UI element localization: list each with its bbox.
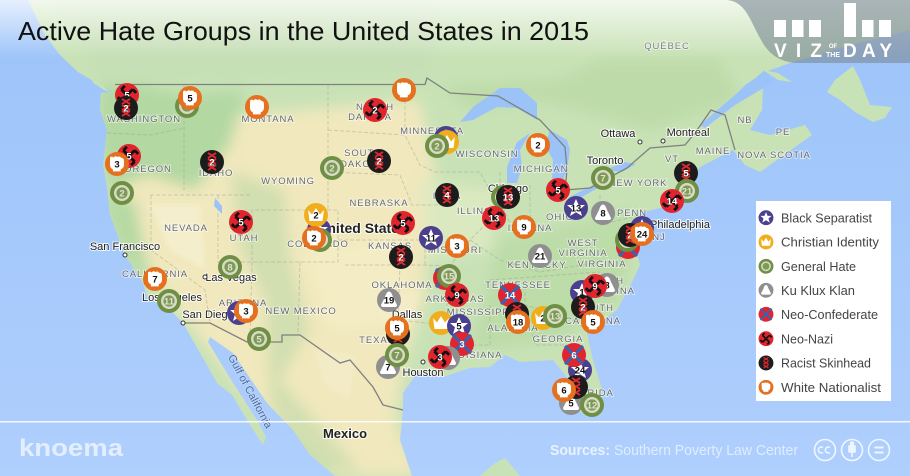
geographic labels: WISCONSIN — [456, 149, 518, 160]
marker: Neo-Confederate FL — [562, 343, 586, 367]
marker: General Hate FL: 12 — [587, 400, 597, 412]
geographic labels: NORTH — [586, 276, 624, 287]
marker: Racist Skinhead ID — [200, 150, 224, 174]
geographic labels: QUÉBEC — [644, 41, 690, 52]
marker: Racist Skinhead SD — [367, 149, 391, 173]
marker: Black Separatist AZ — [227, 301, 251, 325]
geographic labels: IOWA — [433, 191, 461, 202]
legend: General Hate: General Hate — [781, 259, 856, 274]
marker: General Hate MA: 21 — [682, 186, 693, 198]
marker: Racist Skinhead IL — [496, 185, 520, 209]
geographic labels: COLORADO — [287, 239, 349, 250]
marker: Neo-Nazi NC — [583, 274, 607, 298]
legend: Ku Klux Klan: Ku Klux Klan — [781, 283, 855, 298]
marker: White Nationalist AL — [506, 310, 530, 334]
marker: Racist Skinhead KS — [389, 245, 413, 269]
marker: Neo-Confederate AR — [433, 266, 457, 290]
borders: international — [115, 78, 735, 410]
marker: Christian Identity GA — [531, 306, 555, 330]
marker: White Nationalist CO — [302, 226, 326, 250]
marker: General Hate GA — [543, 304, 567, 328]
legend — [756, 201, 891, 401]
legend: Black Separatist: Black Separatist — [781, 210, 872, 226]
marker: Ku Klux Klan OK — [377, 288, 401, 312]
geographic labels: TENNESSEE — [485, 280, 551, 291]
geographic labels: Ottawa — [601, 128, 636, 140]
marker: Racist Skinhead IL: 13 — [503, 192, 513, 204]
marker: Racist Skinhead SC: 2 — [580, 302, 586, 314]
marker: Racist Skinhead VT: 5 — [683, 168, 689, 180]
marker: Racist Skinhead IA: 4 — [444, 190, 450, 202]
geographic labels: ARIZONA — [219, 298, 267, 309]
geographic labels: NEW YORK — [609, 178, 667, 189]
marker: White Nationalist CO: 2 — [311, 234, 317, 244]
geographic labels: VIRGINIA — [578, 259, 626, 270]
geographic labels: ALABAMA — [487, 323, 539, 334]
marker: Neo-Nazi ND: 2 — [372, 106, 378, 116]
marker: Racist Skinhead VT — [674, 161, 698, 185]
marker: Black Separatist MO: 11 — [426, 234, 437, 244]
geographic labels: WASHINGTON — [107, 114, 181, 125]
legend: Christian Identity: Christian Identity — [781, 234, 879, 250]
geographic labels: NOVA SCOTIA — [737, 150, 811, 161]
geographic labels: TEXAS — [359, 335, 395, 346]
marker: General Hate NV — [218, 255, 242, 279]
geographic labels — [90, 41, 811, 441]
geographic labels: WYOMING — [261, 176, 315, 187]
geographic labels: INDIANA — [508, 223, 552, 234]
logo: Viz of the Day: OF — [829, 44, 837, 50]
marker: White Nationalist NJ: 24 — [637, 230, 648, 240]
geographic labels: Las Vegas — [205, 272, 257, 284]
marker: Racist Skinhead ID: 2 — [209, 158, 215, 168]
geographic labels: PENN — [617, 208, 647, 219]
marker: Black Separatist NC — [570, 280, 594, 304]
marker: Neo-Confederate TN — [498, 283, 522, 307]
marker: White Nationalist SC: 5 — [590, 318, 596, 328]
marker: Neo-Nazi WA — [115, 83, 139, 107]
marker: White Nationalist OR — [105, 152, 129, 176]
geographic labels: MICHIGAN — [514, 164, 568, 175]
marker: White Nationalist AZ: 3 — [243, 306, 249, 318]
marker: White Nationalist WA — [178, 86, 202, 110]
marker: Black Separatist OH — [564, 196, 588, 220]
marker: Neo-Nazi KS: 5 — [400, 218, 406, 230]
geographic labels: MINNESOTA — [400, 126, 464, 137]
marker: Racist Skinhead MD — [618, 223, 642, 247]
marker: White Nationalist TX — [385, 316, 409, 340]
logo: Viz of the Day: THE — [826, 52, 840, 59]
geographic labels: NEBRASKA — [350, 198, 408, 209]
marker: General Hate CA: 11 — [164, 296, 175, 308]
marker: Neo-Confederate TN: 14 — [505, 290, 516, 302]
marker: White Nationalist FL — [552, 378, 576, 402]
license icons — [814, 440, 890, 460]
geographic labels: LOUISIANA — [444, 350, 502, 361]
geographic labels: SOUTH — [576, 303, 614, 314]
marker: Racist Skinhead KS: 2 — [398, 252, 404, 264]
marker: Racist Skinhead TX — [386, 322, 410, 346]
logo: Viz of the Day — [725, 0, 910, 63]
marker: Neo-Nazi AR: 9 — [454, 290, 460, 302]
marker: Racist Skinhead SD: 2 — [376, 156, 382, 168]
title band — [0, 0, 910, 58]
marker: General Hate AZ: 5 — [256, 334, 262, 346]
geographic labels: San Diego — [182, 309, 234, 321]
marker: Ku Klux Klan NC — [595, 273, 619, 297]
marker: Black Separatist MO — [419, 226, 443, 250]
marker: General Hate OR — [110, 181, 134, 205]
marker: Ku Klux Klan TX: 7 — [385, 362, 391, 374]
marker: Black Separatist AZ: 7 — [236, 308, 242, 320]
legend: Racist Skinhead: Racist Skinhead — [781, 356, 871, 371]
marker: Neo-Nazi LA: 3 — [437, 352, 443, 364]
geographic labels: OHIO — [546, 212, 574, 223]
marker: General Hate NV: 8 — [227, 262, 233, 274]
legend: Neo-Nazi — [759, 331, 833, 346]
marker: General Hate MN: 2 — [434, 142, 440, 152]
marker: Neo-Confederate FL: 6 — [571, 350, 577, 362]
marker: General Hate AZ — [247, 327, 271, 351]
marker: White Nationalist MT — [245, 95, 269, 119]
geographic labels: Gulf of California — [225, 353, 275, 431]
marker: Neo-Confederate VA — [616, 235, 640, 259]
marker: Neo-Nazi NY: 14 — [667, 196, 678, 208]
geographic labels: Philadelphia — [650, 219, 711, 231]
great lakes — [214, 70, 772, 214]
geographic labels: Montreal — [667, 127, 709, 139]
title: Active Hate Groups in the United States in 2015 — [18, 16, 589, 46]
geographic labels: UTAH — [230, 233, 258, 244]
legend: White Nationalist: White Nationalist — [781, 380, 881, 395]
marker: Christian Identity MN — [435, 130, 459, 154]
marker: Black Separatist MS: 5 — [456, 322, 462, 332]
marker: Neo-Nazi UT — [229, 210, 253, 234]
marker: Christian Identity LA — [429, 311, 453, 335]
geographic labels: Toronto — [587, 155, 623, 167]
geographic labels: IDAHO — [199, 168, 233, 179]
footer divider — [0, 421, 910, 422]
geographic labels: DAKOTA — [340, 159, 384, 170]
logo: Viz of the Day: DAY — [843, 41, 892, 62]
marker: White Nationalist MO: 3 — [454, 242, 460, 252]
geographic labels: PE — [776, 127, 790, 138]
marker: Neo-Nazi ND — [363, 98, 387, 122]
geographic labels: MONTANA — [241, 114, 295, 125]
marker: Racist Skinhead WA — [114, 96, 138, 120]
marker: White Nationalist MO — [445, 234, 469, 258]
geographic labels: CAROLINA — [579, 286, 635, 297]
geographic labels: CALIFORNIA — [122, 269, 188, 280]
marker: General Hate AR — [437, 264, 461, 288]
legend: Neo-Nazi: Neo-Nazi — [781, 332, 833, 346]
marker: White Nationalist IN — [512, 215, 536, 239]
marker: Neo-Nazi IL — [482, 206, 506, 230]
marker: White Nationalist AL: 18 — [513, 318, 523, 328]
marker: Neo-Nazi UT: 5 — [238, 218, 244, 228]
geographic labels: SOUTH — [344, 148, 382, 159]
marker: White Nationalist WA: 5 — [187, 94, 193, 104]
marker: Neo-Nazi OR: 5 — [126, 152, 132, 162]
marker: Neo-Nazi WA: 5 — [124, 90, 130, 102]
marker: Christian Identity CO — [304, 203, 328, 227]
marker: Racist Skinhead IA — [435, 183, 459, 207]
marker: General Hate NY: 7 — [600, 174, 606, 184]
marker: Neo-Nazi IL: 13 — [489, 214, 499, 224]
marker: White Nationalist TX: 5 — [394, 324, 400, 334]
marker: Black Separatist NJ — [630, 216, 654, 240]
marker: Neo-Nazi MI: 5 — [555, 186, 561, 196]
marker: General Hate MA — [675, 179, 699, 203]
geographic labels: ARKANSAS — [426, 294, 484, 305]
marker: General Hate GA: 13 — [550, 312, 560, 322]
markers — [105, 78, 699, 417]
sources: Sources: Southern Poverty Law Center — [550, 442, 798, 459]
marker: Ku Klux Klan OK: 19 — [384, 296, 394, 306]
marker: Black Separatist FL: 24 — [575, 366, 586, 376]
marker: Ku Klux Klan FL: 5 — [568, 398, 574, 410]
marker: Racist Skinhead AL — [505, 302, 529, 326]
geographic labels: NB — [738, 115, 752, 126]
marker: General Hate IL — [491, 185, 515, 209]
marker: Ku Klux Klan PA: 8 — [600, 208, 606, 220]
geographic labels: NJ — [652, 232, 666, 243]
marker: Black Separatist NC: 1 — [579, 288, 585, 298]
geographic labels: MAINE — [696, 146, 730, 157]
marker: General Hate CA — [157, 289, 181, 313]
marker: Neo-Nazi MI — [546, 178, 570, 202]
marker: Ku Klux Klan KY — [528, 244, 552, 268]
geographic labels: GEORGIA — [533, 334, 583, 345]
marker: General Hate OR: 2 — [119, 188, 125, 200]
knoema logo: knoema — [19, 435, 124, 462]
marker: Black Separatist OH: 13 — [571, 204, 581, 214]
geographic labels: VIRGINIA — [559, 248, 607, 259]
geographic labels: OREGON — [124, 164, 172, 175]
geographic labels: United States — [317, 220, 407, 236]
marker: Racist Skinhead SC — [571, 295, 595, 319]
marker: White Nationalist MN — [392, 78, 416, 102]
geographic labels: NEVADA — [164, 223, 208, 234]
marker: Christian Identity GA: 2 — [540, 314, 546, 324]
marker: Neo-Nazi NY — [660, 189, 684, 213]
geographic labels: CAROLINA — [565, 316, 621, 327]
geographic labels: DAKOTA — [348, 112, 392, 123]
logo: Viz of the Day: VIZ — [774, 41, 822, 62]
marker: General Hate FL — [580, 393, 604, 417]
marker: White Nationalist MI — [526, 133, 550, 157]
geographic labels: KANSAS — [368, 241, 412, 252]
geographic labels: NEW MEXICO — [265, 306, 337, 317]
marker: White Nationalist OR: 3 — [114, 160, 120, 170]
marker: Neo-Confederate LA: 3 — [459, 340, 465, 350]
marker: General Hate WY — [320, 156, 344, 180]
marker: Ku Klux Klan TX — [376, 355, 400, 379]
marker: General Hate CO — [308, 228, 332, 252]
geographic labels: FLORIDA — [566, 388, 614, 399]
marker: General Hate AR: 15 — [444, 272, 455, 282]
marker: Neo-Confederate LA — [450, 332, 474, 356]
marker: General Hate NY — [591, 166, 615, 190]
marker: Racist Skinhead WA: 2 — [123, 104, 129, 114]
marker: White Nationalist MI: 2 — [535, 140, 541, 152]
marker: Black Separatist MS — [447, 314, 471, 338]
marker: Neo-Nazi AR — [445, 283, 469, 307]
geographic labels: Mexico — [323, 426, 367, 441]
marker: Black Separatist FL — [568, 358, 592, 382]
marker: Christian Identity CO: 2 — [313, 210, 319, 222]
marker: Racist Skinhead MD: 2 — [627, 230, 633, 242]
geographic labels: NORTH — [356, 102, 394, 113]
marker: Ku Klux Klan FL — [559, 391, 583, 415]
marker: White Nationalist CA — [143, 267, 167, 291]
geographic labels: MISSISSIPPI — [447, 307, 513, 318]
marker: White Nationalist FL: 6 — [561, 386, 567, 396]
marker: Ku Klux Klan NC: 8 — [604, 280, 610, 292]
marker: Neo-Nazi LA — [428, 345, 452, 369]
marker: General Hate MD — [615, 228, 639, 252]
marker: General Hate WY: 2 — [329, 164, 335, 174]
geographic labels: Houston — [403, 367, 443, 379]
marker: Black Separatist CO — [307, 218, 331, 242]
marker: Neo-Nazi OR — [117, 144, 141, 168]
marker: Neo-Nazi NC: 9 — [592, 282, 598, 292]
geographic labels: MISSOURI — [428, 245, 482, 256]
marker: Racist Skinhead FL — [564, 375, 588, 399]
geographic labels: OKLAHOMA — [371, 280, 433, 291]
marker: White Nationalist CA: 7 — [152, 274, 158, 286]
marker: White Nationalist AZ — [234, 299, 258, 323]
geographic labels: WEST — [567, 238, 599, 249]
marker: White Nationalist IN: 9 — [521, 222, 527, 234]
geographic labels: San Francisco — [90, 241, 160, 253]
geographic labels: VT — [665, 154, 679, 165]
legend: Neo-Confederate: Neo-Confederate — [781, 307, 878, 322]
marker: Ku Klux Klan PA — [591, 201, 615, 225]
marker: Ku Klux Klan KY: 21 — [535, 252, 546, 262]
geographic labels: Los Angeles — [142, 292, 202, 304]
geographic labels: KENTUCKY — [508, 260, 566, 271]
state borders — [107, 85, 640, 345]
marker: General Hate MN — [425, 134, 449, 158]
marker: General Hate WA — [175, 94, 199, 118]
marker: White Nationalist SC — [581, 310, 605, 334]
marker: Black Separatist MN — [434, 126, 458, 150]
geographic labels: Chicago — [488, 183, 528, 195]
marker: White Nationalist NJ — [630, 222, 654, 246]
newfoundland and islands — [92, 66, 892, 476]
marker: Ku Klux Klan LA — [436, 346, 460, 370]
marker: General Hate TX: 7 — [394, 350, 400, 362]
geographic labels: ILLINOIS — [457, 206, 503, 217]
geographic labels: Dallas — [392, 309, 423, 321]
marker: General Hate TX — [385, 343, 409, 367]
marker: Neo-Nazi KS — [391, 211, 415, 235]
